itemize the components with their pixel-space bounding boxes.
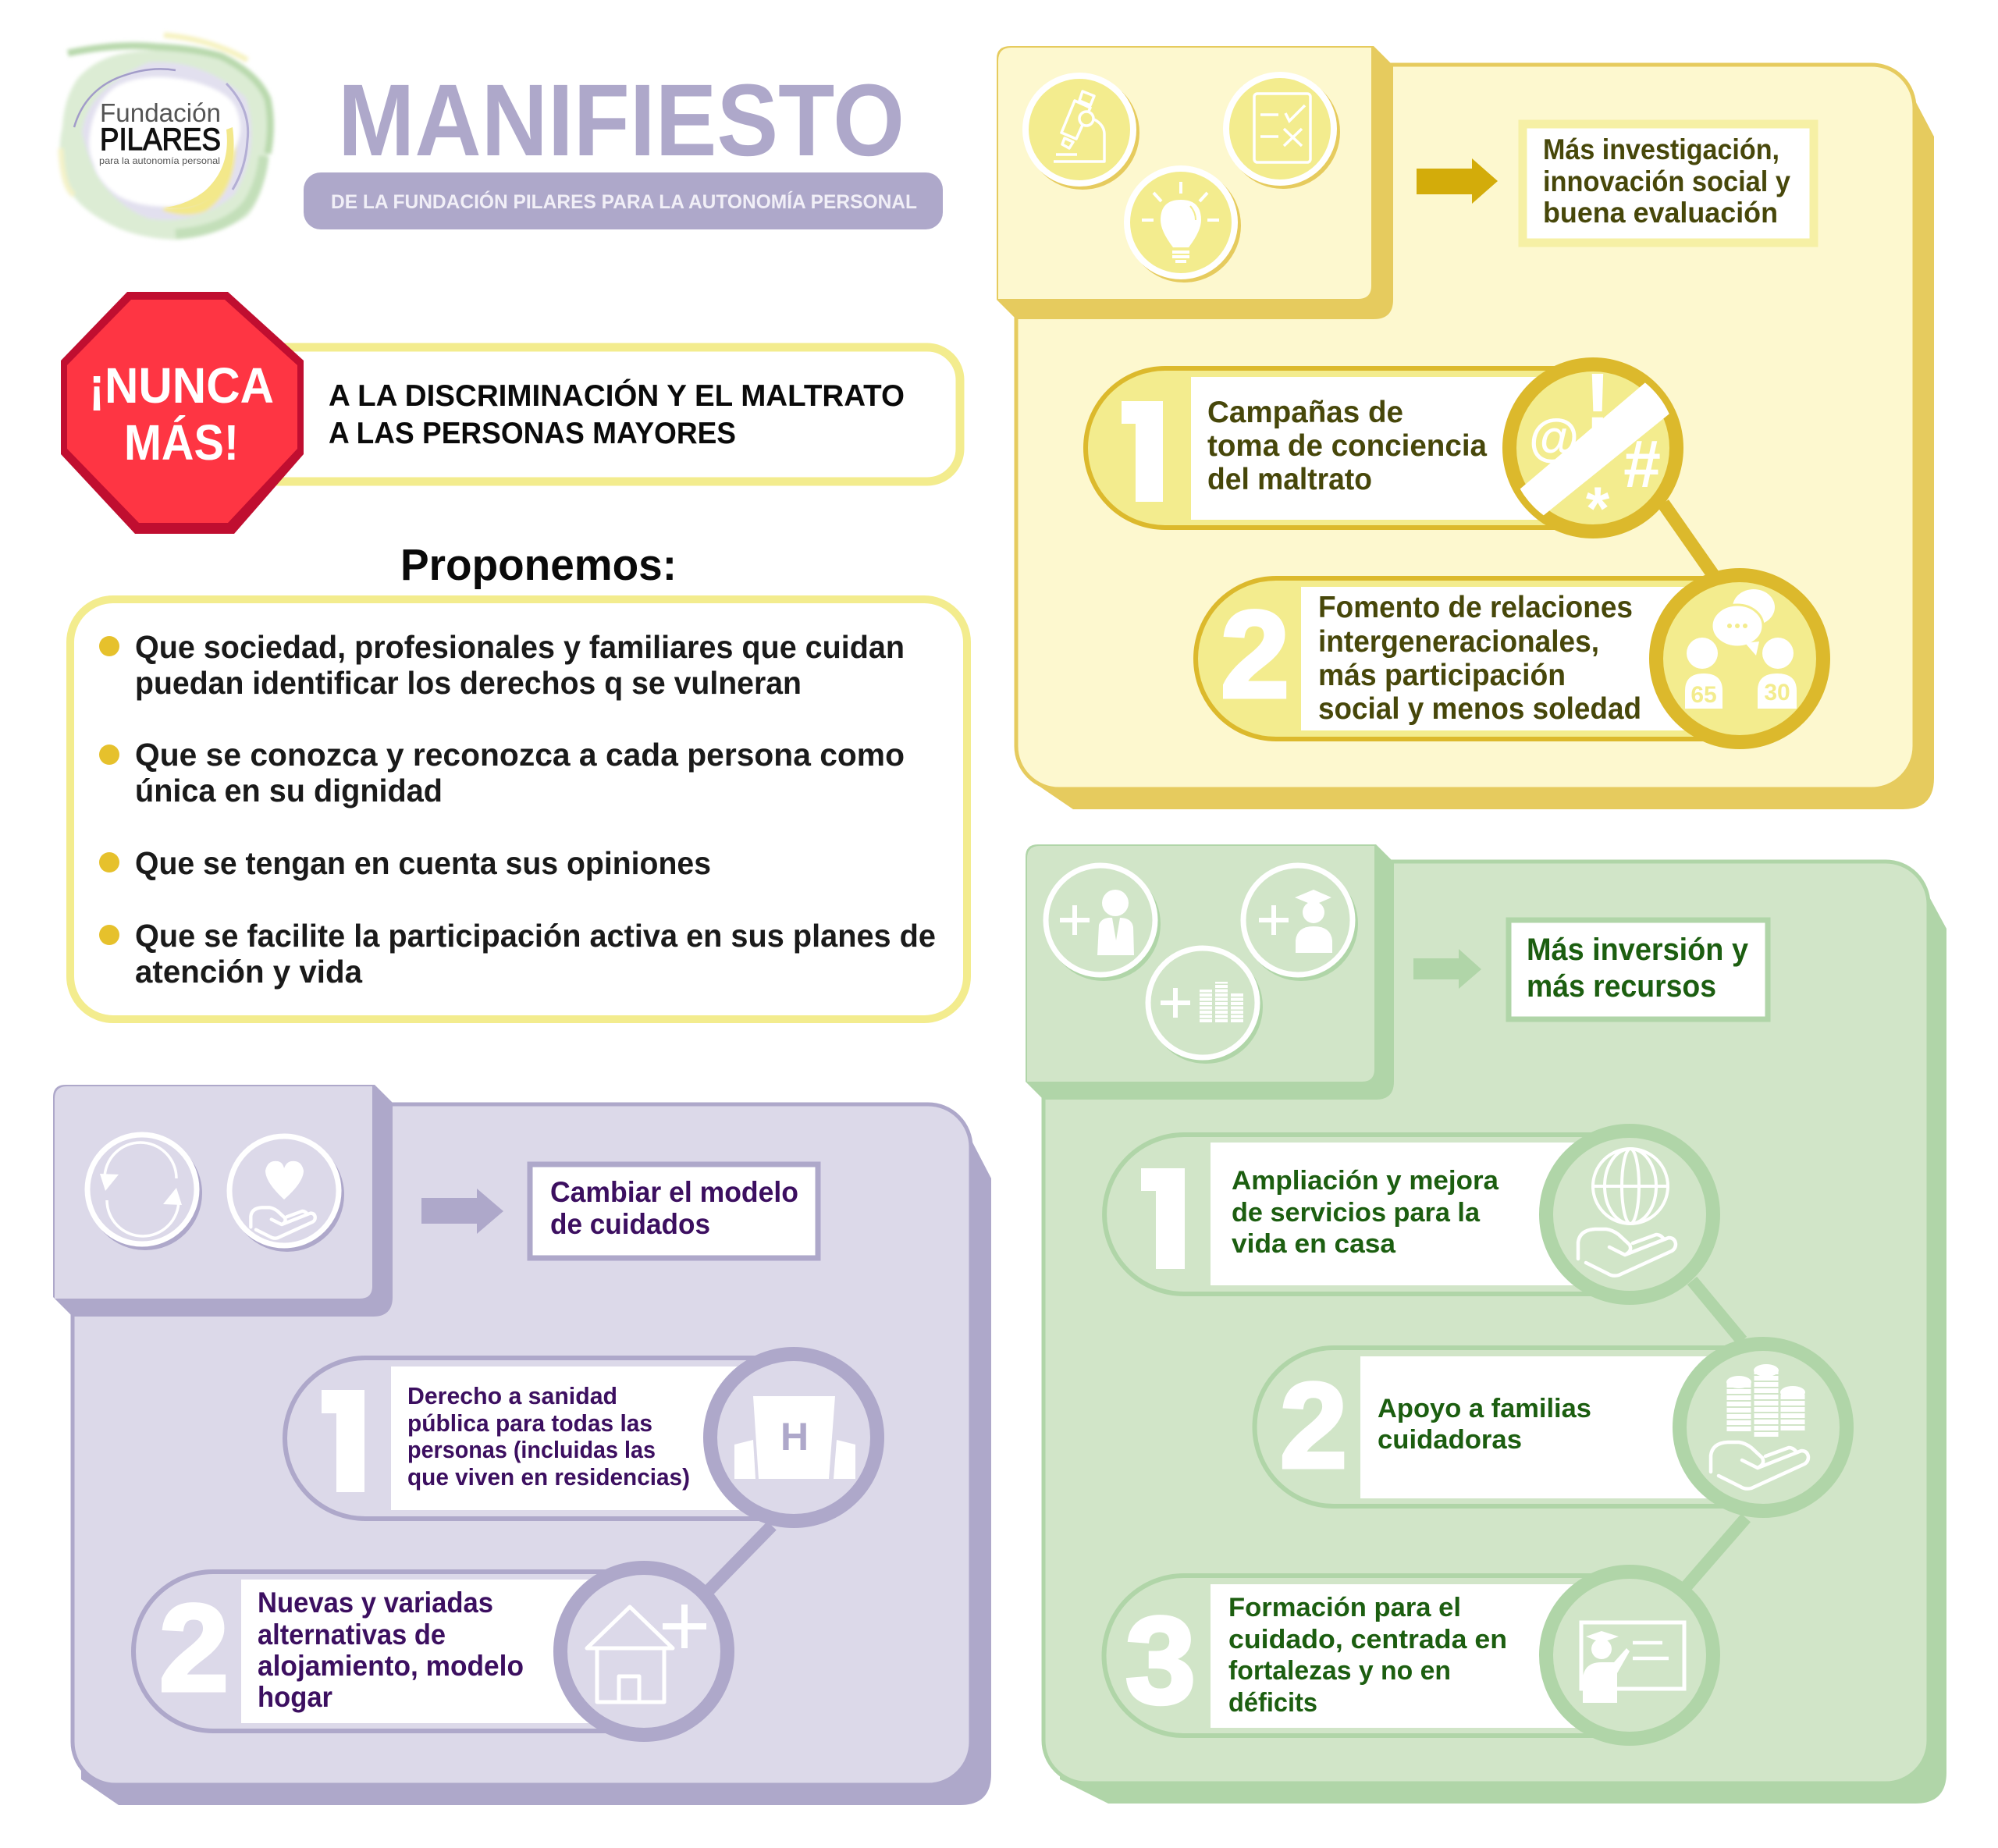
proposals list: Que sociedad, profesionales y familiares que cuidan <box>135 629 905 665</box>
item: housing: hogar <box>258 1681 332 1713</box>
item: training: Formación para el <box>1228 1593 1461 1622</box>
callout: research: buena evaluación <box>1543 197 1778 229</box>
icon: checklist <box>1226 75 1340 189</box>
proposals list: única en su dignidad <box>135 773 443 808</box>
subtitle bar: DE LA FUNDACIÓN PILARES PARA LA AUTONOMÍA PERSONAL <box>331 190 917 213</box>
panel: green investment <box>1026 844 1946 1804</box>
item: public health: personas (incluidas las <box>407 1436 656 1463</box>
panel: purple care model <box>53 1085 991 1805</box>
item: relations: Fomento de relaciones <box>1318 591 1633 624</box>
statement box: A LAS PERSONAS MAYORES <box>329 417 736 450</box>
item: public health: pública para todas las <box>407 1409 652 1437</box>
callout: research: Más investigación, <box>1543 133 1779 165</box>
icon: heart in hand <box>229 1136 344 1252</box>
item: family support <box>1255 1344 1847 1511</box>
item: public health: 1 <box>308 1363 389 1523</box>
item: relations: 2 <box>1221 586 1289 723</box>
item: relations <box>1196 575 1823 742</box>
callout: investment: Más inversión y <box>1527 933 1749 967</box>
proposals list <box>70 599 967 1019</box>
logo: Fundación <box>100 98 221 127</box>
panel: yellow research <box>997 46 1934 809</box>
header tab <box>53 1085 393 1317</box>
stop sign: ¡NUNCA <box>89 357 274 414</box>
icon: more funds <box>1148 948 1263 1064</box>
item: relations: social y menos soledad <box>1318 692 1641 726</box>
item: training <box>1104 1572 1713 1739</box>
item: family support: 2 <box>1280 1358 1347 1493</box>
callout: care model: Cambiar el modelo <box>550 1176 798 1208</box>
item: home services <box>1104 1131 1713 1299</box>
proposals list: Que se conozca y reconozca a cada persona como <box>135 737 905 773</box>
item: campaigns <box>1083 357 1683 538</box>
item: training: 3 <box>1125 1592 1196 1729</box>
proposals list: atención y vida <box>135 954 363 990</box>
item: housing: Nuevas y variadas <box>258 1587 493 1619</box>
callout: care model <box>530 1164 818 1258</box>
item: home services: vida en casa <box>1232 1229 1396 1259</box>
callout: care model: de cuidados <box>550 1208 710 1240</box>
proposals list: puedan identificar los derechos q se vulneran <box>135 665 802 701</box>
icon: no insults: @ <box>1529 408 1579 466</box>
item: home services: Ampliación y mejora <box>1232 1166 1499 1196</box>
header tab <box>997 46 1393 319</box>
icon: hospital: H <box>780 1415 809 1459</box>
icon: teacher <box>1546 1572 1713 1739</box>
icon: light bulb <box>1127 169 1241 283</box>
item: training: fortalezas y no en <box>1228 1656 1451 1686</box>
proposals list: Que se facilite la participación activa en sus planes de <box>135 918 936 954</box>
icon: no insults <box>1502 357 1683 538</box>
icon: no insults: ! <box>1584 357 1611 445</box>
item: housing <box>133 1568 727 1735</box>
item: relations: intergeneracionales, <box>1318 625 1599 659</box>
item: family support: Apoyo a familias <box>1378 1394 1591 1423</box>
item: public health: que viven en residencias) <box>407 1463 690 1491</box>
icon: cycle <box>87 1135 202 1250</box>
icon: hospital <box>710 1354 877 1521</box>
item: training: cuidado, centrada en <box>1228 1625 1507 1654</box>
item: housing: 2 <box>159 1580 229 1717</box>
icon: globe in hand <box>1546 1131 1713 1298</box>
title: MANIFIESTO <box>338 62 905 177</box>
item: public health <box>285 1354 877 1523</box>
logo: para la autonomía personal <box>99 155 220 166</box>
statement box <box>234 347 960 482</box>
callout: research <box>1523 124 1814 243</box>
stop sign <box>61 292 304 534</box>
header tab <box>1026 844 1394 1100</box>
item: campaigns: toma de conciencia <box>1207 429 1487 463</box>
logo: PILARES <box>100 123 221 157</box>
icon: more training <box>1243 865 1358 981</box>
icon: no insults: * <box>1586 474 1610 542</box>
icon: coins in hand <box>1680 1344 1847 1511</box>
item: campaigns: 1 <box>1107 375 1185 532</box>
icon: more staff <box>1046 865 1161 981</box>
stop sign: MÁS! <box>124 414 239 471</box>
statement box: A LA DISCRIMINACIÓN Y EL MALTRATO <box>329 378 905 413</box>
icon: house plus <box>560 1568 727 1735</box>
icon: microscope <box>1026 76 1139 190</box>
item: public health: Derecho a sanidad <box>407 1382 617 1409</box>
arrow <box>1417 158 1498 204</box>
icon: generations <box>1656 575 1823 742</box>
item: campaigns: del maltrato <box>1207 463 1372 496</box>
item: home services: 1 <box>1128 1143 1206 1299</box>
icon: generations: 65 <box>1690 682 1717 708</box>
arrow <box>1413 949 1481 989</box>
callout: research: innovación social y <box>1543 165 1790 197</box>
icon: no insults: # <box>1623 427 1661 502</box>
item: relations: más participación <box>1318 659 1566 692</box>
heading: Proponemos: <box>400 540 677 590</box>
item: training: déficits <box>1228 1688 1317 1718</box>
arrow <box>421 1189 503 1234</box>
subtitle bar <box>304 172 943 229</box>
logo <box>60 35 271 240</box>
item: housing: alojamiento, modelo <box>258 1650 524 1682</box>
item: campaigns: Campañas de <box>1207 396 1403 429</box>
item: family support: cuidadoras <box>1378 1425 1522 1455</box>
callout: investment <box>1509 920 1768 1019</box>
item: home services: de servicios para la <box>1232 1198 1481 1228</box>
callout: investment: más recursos <box>1527 969 1716 1004</box>
icon: generations: 30 <box>1764 680 1790 705</box>
item: housing: alternativas de <box>258 1619 446 1651</box>
proposals list: Que se tengan en cuenta sus opiniones <box>135 845 711 881</box>
